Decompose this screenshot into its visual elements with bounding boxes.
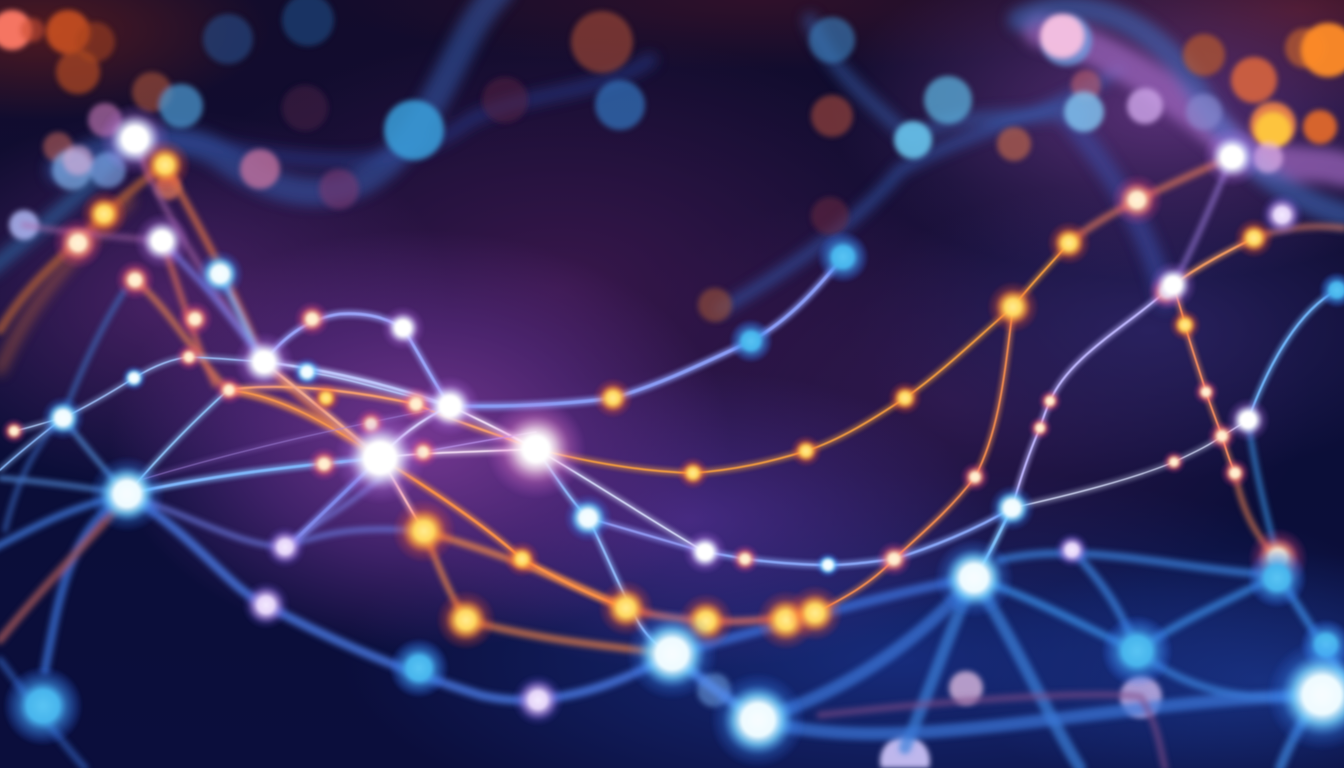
glowing nodes: left cluster — [1, 103, 612, 746]
blurred background strands — [0, 0, 1344, 370]
glowing nodes: right cluster — [934, 127, 1344, 751]
thick blue network strands — [0, 290, 1344, 768]
glowing nodes: centre chain — [593, 231, 1039, 768]
orange and pink upper-left strands — [0, 140, 1344, 654]
sharp network connection lines — [0, 238, 1337, 654]
